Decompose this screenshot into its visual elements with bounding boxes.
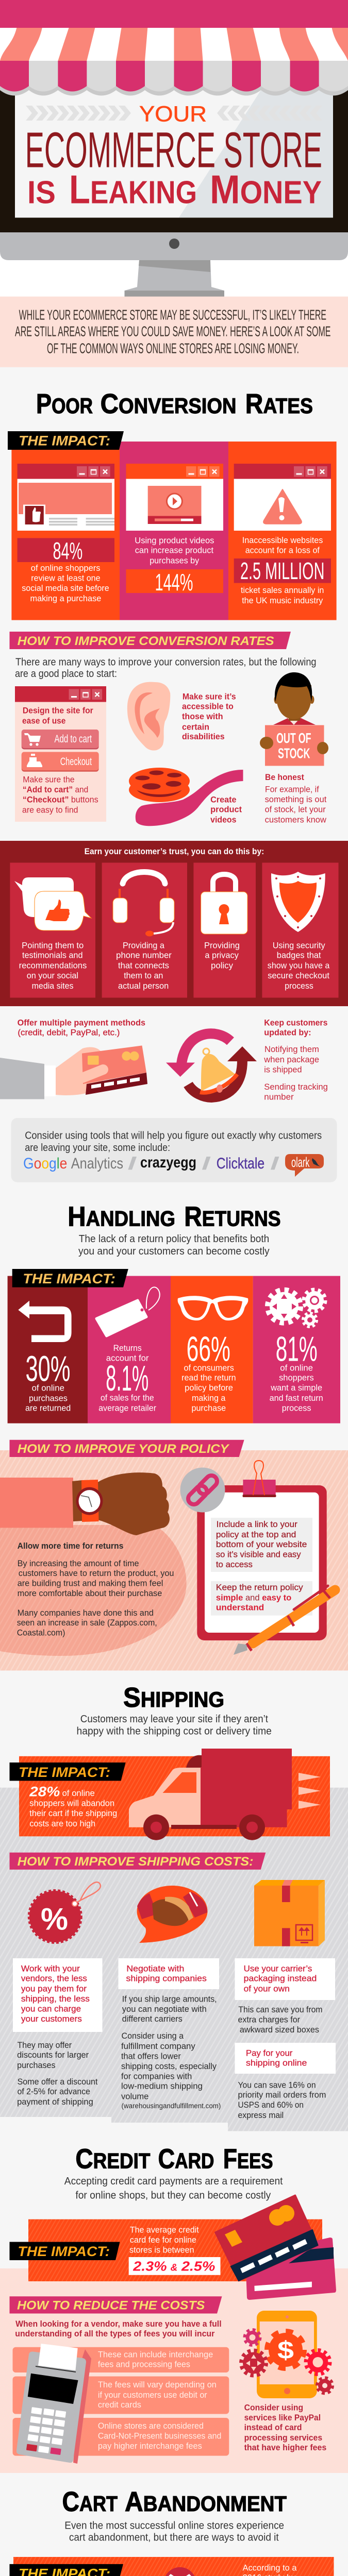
text: allow more time: customers have to return the product, you	[19, 1569, 174, 1578]
panel: shipping impact	[9, 1749, 330, 1840]
impact tag	[12, 1269, 128, 1287]
card: security badges: badges that	[277, 951, 321, 960]
text: keep customers updated: Notifying them	[264, 1045, 319, 1054]
text: packaging details: extra charges for	[238, 2015, 300, 2025]
text: negotiate details: you can negotiate with	[122, 2005, 207, 2014]
stat window: accessibility: account for a loss of	[245, 546, 320, 555]
card: testimonials: testimonials and	[22, 951, 82, 960]
banner	[9, 1440, 244, 1457]
text: be honest tip: something is out	[265, 795, 327, 804]
stat: 8.1% of sales: 8.1%	[106, 1358, 148, 1398]
stat: 8.1% of sales	[96, 1287, 160, 1413]
heading: handling returns: RETURNS	[184, 1201, 281, 1232]
callout: fee range: 2.5%	[181, 2259, 215, 2274]
list: fee rows: if your customers use debit or	[98, 2391, 207, 2400]
panel: improve your policy	[0, 1440, 348, 1670]
card: phone: actual person	[118, 981, 169, 991]
heading: handling returns: HANDLING	[68, 1201, 175, 1232]
text: credit card intro: for online shops, but they can become costly	[75, 2190, 271, 2201]
card: phone: them to an	[124, 971, 163, 980]
banner: how to improve conversion rates	[9, 632, 291, 649]
text: negotiate details: that offers lower	[121, 2052, 181, 2061]
text: accessibility tip: certain	[182, 722, 209, 732]
panel: earn trust: Earn your customer’s trust, you can do this by:	[85, 847, 264, 856]
stat: 30% returned: 30%	[26, 1348, 70, 1388]
stat: 66% read policy: read the return	[181, 1374, 236, 1383]
text: negotiate details: If you ship large amounts,	[122, 1994, 217, 2004]
text: be honest tip: customers know	[265, 816, 326, 825]
list: fee rows: These can include interchange	[98, 2350, 213, 2360]
tip: work with vendors: your customers	[21, 2014, 82, 2024]
stat: 66% read policy: 66%	[187, 1329, 230, 1368]
tip: work with vendors	[13, 1958, 102, 2032]
stat: 66% read policy: purchase	[192, 1403, 226, 1413]
impact tag	[9, 2564, 123, 2576]
icon: discount seal	[29, 1882, 101, 1942]
stat window: video	[126, 464, 223, 596]
text: vendor details: discounts for larger	[17, 2050, 89, 2060]
title	[25, 102, 322, 212]
banner: improve shipping costs: HOW TO IMPROVE SHIPPING COSTS:	[18, 1855, 254, 1869]
list: fee rows: pay higher interchange fees	[98, 2442, 202, 2451]
stat window: accessibility: Inaccessible websites	[242, 536, 323, 545]
text: keep customers updated: when package	[263, 1055, 319, 1064]
stat: 8.1% of sales: average retailer	[98, 1403, 157, 1413]
intro band	[0, 297, 348, 367]
text: keep customers updated	[263, 1018, 328, 1101]
text: allow more time: Many companies have done this and	[18, 1608, 154, 1618]
panel: credit card section	[0, 2195, 348, 2473]
logo: clicktale: Clicktale	[217, 1155, 264, 1172]
tip: carrier packaging: Use your carrier’s	[244, 1964, 312, 1973]
icon: basket with x	[134, 2567, 231, 2576]
stat: 8.1% of sales: of sales for the	[101, 1393, 154, 1402]
heading: credit card fees: FEES	[223, 2144, 273, 2175]
note: link to policy: bottom of your website	[216, 1540, 307, 1549]
panel: design window: Make sure the	[23, 775, 75, 785]
icon: delivery truck	[129, 1749, 321, 1840]
text: allow more time	[17, 1541, 174, 1637]
text: 28%: costs are too high	[29, 1819, 95, 1828]
text: accessibility tip: disabilities	[182, 732, 225, 741]
note: link to policy	[211, 1518, 312, 1572]
panel: returns impact	[8, 1269, 340, 1423]
list: fee rows: Card-Not-Present businesses and	[98, 2432, 221, 2441]
callout: fee range	[129, 2257, 221, 2275]
text: allow more time: Coastal.com)	[17, 1628, 65, 1637]
card: privacy: policy	[211, 961, 234, 971]
stat: 30% returned: are returned	[25, 1403, 71, 1413]
icon: handshake bubble	[137, 1886, 207, 1943]
text: consider paypal	[244, 2403, 326, 2452]
note: simple policy: simple and easy to	[216, 1594, 291, 1603]
add to cart button: Add to cart	[55, 733, 92, 745]
logo: olark	[285, 1154, 324, 1177]
tip: carrier packaging: of your own	[244, 1984, 290, 1993]
tip: work with vendors: Work with your	[21, 1964, 80, 1973]
text: shipping intro: happy with the shipping cost or delivery time	[76, 1725, 272, 1737]
heading: handling returns	[68, 1201, 281, 1232]
note: simple policy: Keep the return policy	[216, 1583, 303, 1592]
note: link to policy: Include a link to your	[217, 1520, 297, 1529]
text: keep customers updated: number	[264, 1092, 294, 1101]
heading: credit card fees: CREDIT	[75, 2144, 151, 2175]
card: phone: Providing a	[123, 941, 165, 950]
tip: negotiate: shipping companies	[126, 1974, 207, 1984]
text: vendor details: They may offer	[18, 2041, 72, 2050]
text: consider paypal: instead of card	[244, 2423, 302, 2432]
card: privacy: a privacy	[205, 951, 239, 960]
title: MONEY	[210, 167, 322, 212]
text: create product videos: Create	[210, 795, 236, 805]
panel: design window: Design the site for	[23, 706, 93, 715]
text: vendor details	[17, 2041, 98, 2107]
text: negotiate details	[121, 1994, 221, 2110]
icon: card terminal	[16, 2344, 91, 2464]
text: keep customers updated: Sending tracking	[264, 1082, 328, 1092]
text: consider paypal: that have higher fees	[244, 2443, 326, 2452]
panel: credit impact: The average credit	[130, 2226, 199, 2235]
text: shipping intro	[76, 1714, 272, 1737]
text: be honest tip: For example, if	[265, 785, 319, 794]
text: conversion intro	[15, 656, 317, 680]
text: payment methods: (credit, debit, PayPal, etc.)	[18, 1028, 120, 1037]
card: security badges: process	[285, 981, 313, 991]
list: fee rows: The fees will vary depending on	[98, 2380, 217, 2389]
text: be honest tip: Be honest	[265, 773, 304, 782]
stat window: video: Using product videos	[135, 536, 214, 545]
panel: credit impact	[9, 2219, 322, 2281]
stat: 30% returned	[18, 1301, 72, 1413]
heading: shipping: SHIPPING	[123, 1682, 224, 1713]
panel: design window: “Add to cart” and	[23, 785, 88, 794]
icon: clipboard	[197, 1461, 327, 1640]
tip: work with vendors: shipping, the less	[21, 1994, 90, 2004]
stat: 66% read policy: of consumers	[184, 1364, 234, 1373]
panel: analytics tools	[11, 1118, 337, 1182]
panel: design window: “Checkout” buttons	[23, 795, 98, 805]
stat: 68.63%	[242, 2564, 320, 2576]
text: conversion intro: There are many ways to improve your conversion rates, but the following	[15, 656, 317, 668]
stat window: accessibility: the UK music industry	[242, 596, 323, 605]
text: packaging details: This can save you from	[238, 2005, 323, 2014]
text: keep customers updated: updated by:	[264, 1028, 311, 1037]
tip: work with vendors: you pay them for	[21, 1984, 87, 1993]
icon: film reel	[129, 768, 243, 826]
text: allow more time: seen an increase in sale (Zappos.com,	[17, 1618, 157, 1628]
text: packaging details	[238, 2005, 323, 2035]
text: negotiate details: Consider using a	[122, 2031, 184, 2041]
impact tag: THE IMPACT:	[23, 1271, 115, 1286]
text: shipping intro: Customers may leave your site if they aren’t	[80, 1714, 268, 1725]
icon: ear	[127, 682, 170, 751]
text: cart intro: Even the most successful online stores experience	[64, 2520, 284, 2531]
checkout button	[22, 752, 99, 772]
text: accessibility tip: those with	[182, 712, 223, 721]
heading: credit card fees: CARD	[158, 2144, 214, 2175]
panel: analytics tools: Consider using tools that will help you figure out exactly why customers	[25, 1130, 322, 1142]
stat window: video: purchases by	[150, 556, 200, 566]
note: link to policy: to access	[216, 1560, 253, 1569]
card: privacy	[193, 862, 256, 997]
text: negotiate details: (warehousingandfulfillment.com)	[122, 2102, 221, 2110]
text: accessibility tip: Make sure it’s	[183, 692, 236, 702]
card: phone: that connects	[118, 961, 169, 971]
icon: discount seal: %	[41, 1902, 68, 1936]
panel: credit impact: card fee for online	[130, 2235, 196, 2245]
text: negotiate details: fulfillment company	[121, 2042, 196, 2051]
banner: how to reduce the costs: HOW TO REDUCE THE COSTS	[17, 2299, 205, 2312]
stat: 66% read policy: making a	[192, 1394, 226, 1403]
header: storefront monitor	[0, 0, 348, 298]
tip: pay online: Pay for your	[246, 2048, 293, 2058]
logo: google analytics: Analytics	[71, 1155, 123, 1172]
tip: pay online: shipping online	[246, 2058, 307, 2067]
stat window: video: can increase product	[135, 546, 213, 555]
text: cart intro	[64, 2520, 284, 2543]
stat window: social	[18, 464, 114, 603]
banner: HOW TO IMPROVE YOUR POLICY	[18, 1442, 230, 1456]
heading: poor conversion rates: RATES	[245, 388, 313, 419]
text: 28%: of online	[62, 1789, 95, 1798]
banner: how to improve conversion rates: HOW TO IMPROVE CONVERSION RATES	[18, 634, 274, 648]
title: LEAKING	[69, 167, 197, 212]
panel: cart impact	[9, 2557, 334, 2576]
text: be honest tip: of stock, let your	[265, 805, 326, 815]
note: link to policy: so it’s visible and easy	[216, 1550, 301, 1560]
icon: credit cards	[216, 2195, 336, 2300]
stat window: accessibility: ticket sales annually in	[241, 586, 324, 595]
text: consider paypal: Consider using	[244, 2403, 303, 2412]
text: pay online details: You can save 16% on	[238, 2081, 316, 2090]
heading: poor conversion rates: CONVERSION	[101, 388, 236, 419]
text: 28%	[29, 1784, 117, 1828]
text: credit card intro	[64, 2176, 283, 2201]
tip: pay online	[235, 2043, 336, 2074]
list: fee rows	[12, 2347, 229, 2456]
icon: wristwatch arm	[0, 1472, 170, 1535]
panel: analytics tools: are leaving your site, some include:	[25, 1142, 170, 1154]
text: consider paypal: services like PayPal	[244, 2413, 321, 2422]
text: allow more time: more comfortable about their purchase	[18, 1589, 162, 1598]
note: simple policy: understand	[216, 1603, 264, 1613]
card: testimonials: Pointing them to	[22, 941, 84, 950]
text: vendor details: Some offer a discount	[18, 2077, 98, 2087]
text: allow more time: Allow more time for returns	[18, 1541, 123, 1551]
list: fee rows: fees and processing fees	[98, 2360, 190, 2369]
text: keep customers updated: Keep customers	[264, 1018, 327, 1027]
stat window: social: of online shoppers	[31, 564, 100, 573]
icon: pen	[234, 1586, 335, 1655]
stat: 30% returned: purchases	[29, 1394, 68, 1403]
text: allow more time: By increasing the amount of time	[18, 1559, 139, 1568]
logo: google analytics: Google	[23, 1155, 67, 1172]
text: packaging details: awkward sized boxes	[240, 2025, 319, 2035]
icon: man with out of stock sign	[260, 672, 328, 766]
text: negotiate details: shipping costs, especially	[121, 2062, 217, 2071]
text: conversion intro: are a good place to start:	[15, 668, 117, 680]
card: testimonials: on your social	[27, 971, 78, 980]
icon: phone with gears: $	[277, 2337, 294, 2364]
stat window: video: 144%	[155, 569, 193, 596]
text: create product videos	[210, 795, 242, 825]
list: fee rows: credit cards	[98, 2400, 141, 2410]
text: accessibility tip: accessible to	[182, 702, 234, 711]
card: testimonials	[10, 862, 95, 997]
impact tag	[9, 2242, 120, 2260]
card: security badges: show you have a	[268, 961, 330, 971]
add to cart button	[22, 730, 99, 749]
heading: cart abandonment: CART	[62, 2486, 118, 2517]
card: testimonials: media sites	[32, 981, 73, 991]
text: create product videos: product	[210, 805, 242, 815]
stat window: social: review at least one	[31, 574, 101, 583]
text: vendor fees intro: When looking for a vendor, make sure you have a full	[15, 2319, 222, 2329]
text: credit card intro: Accepting credit card payments are a requirement	[64, 2176, 283, 2187]
stat: 81% simple return: and fast return	[270, 1394, 323, 1403]
checkout button: Checkout	[60, 756, 92, 768]
title: IS	[27, 175, 56, 210]
stat window: social: making a purchase	[30, 594, 101, 603]
heading: cart abandonment: ABANDONMENT	[125, 2486, 287, 2517]
note: link to policy: policy at the top and	[216, 1530, 296, 1539]
text: vendor fees intro	[15, 2319, 222, 2338]
panel: design window	[15, 686, 106, 822]
stat: 81% simple return: process	[282, 1403, 311, 1413]
text: keep customers updated: is shipped	[264, 1065, 302, 1074]
icon: cardboard box	[254, 1880, 325, 1946]
card: phone: phone number	[116, 951, 172, 960]
list: fee rows: Online stores are considered	[98, 2421, 204, 2431]
panel: design window: are easy to find	[22, 805, 78, 815]
logo: google analytics	[23, 1155, 123, 1172]
icon: bell with arrows	[166, 1033, 257, 1097]
awning	[0, 0, 348, 96]
tip: work with vendors: vendors, the less	[21, 1974, 87, 1984]
heading: credit card fees	[75, 2144, 273, 2175]
text: vendor details: payment of shipping	[17, 2097, 93, 2107]
stat: 30% returned: of online	[32, 1384, 64, 1393]
impact tag	[9, 1762, 126, 1781]
stat: 8.1% of sales: account for	[106, 1354, 149, 1363]
tip: negotiate: Negotiate with	[126, 1964, 184, 1973]
stat: 66% read policy: policy before	[185, 1383, 233, 1393]
text: be honest tip	[265, 773, 327, 825]
stat: 81% simple return	[268, 1290, 325, 1413]
banner: how to reduce the costs	[9, 2296, 222, 2313]
text: 28%: 28%	[29, 1784, 60, 1800]
tip: work with vendors: you can charge	[21, 2004, 81, 2013]
panel: conversion impact	[8, 431, 337, 620]
text: handling returns intro: you and your customers can become costly	[78, 1246, 270, 1257]
impact tag: THE IMPACT:	[18, 2244, 110, 2259]
panel: earn trust	[0, 841, 348, 1006]
monitor body	[0, 85, 348, 298]
text: pay online details: express mail	[238, 2111, 284, 2120]
card: testimonials: recommendations	[19, 961, 87, 971]
heading: poor conversion rates: POOR	[36, 388, 93, 419]
stat: 81% simple return: shoppers	[279, 1374, 314, 1383]
heading: poor conversion rates	[36, 388, 313, 419]
tip: carrier packaging	[235, 1958, 335, 2000]
text: consider paypal: processing services	[244, 2433, 322, 2443]
text: negotiate details: different carriers	[122, 2014, 183, 2024]
stat window: social: social media site before	[22, 584, 109, 593]
text: accessibility tip	[182, 692, 236, 741]
card: privacy: Providing	[204, 941, 240, 950]
panel: credit impact: stores is between	[129, 2245, 194, 2255]
stat window: accessibility	[234, 464, 331, 605]
text: negotiate details: for companies with	[121, 2072, 192, 2081]
text: pay online details	[238, 2081, 326, 2120]
text: pay online details: USPS and 60% on	[238, 2100, 304, 2110]
stat: 68.63%: According to a	[242, 2564, 297, 2573]
card: security badges	[262, 862, 338, 997]
icon: man with out of stock sign: STOCK	[278, 745, 310, 761]
text: negotiate details: volume	[121, 2092, 148, 2101]
text: pay online details: priority mail orders from	[238, 2091, 326, 2100]
text: create product videos: videos	[210, 816, 236, 825]
text: vendor details: purchases	[17, 2061, 56, 2070]
stat: 81% simple return: of online	[280, 1364, 313, 1373]
stat: 66% read policy	[178, 1296, 248, 1413]
icon: man with out of stock sign: OUT OF	[276, 730, 311, 746]
panel: shipping background	[0, 1788, 348, 2131]
heading: cart abandonment	[62, 2486, 287, 2517]
logo: olark: olark	[291, 1155, 310, 1170]
card: security badges: Using security	[273, 941, 325, 950]
text: payment methods	[18, 1018, 145, 1037]
tip: carrier packaging: packaging instead	[244, 1974, 317, 1984]
icon: phone with gears	[241, 2311, 333, 2398]
text: payment methods: Offer multiple payment methods	[18, 1018, 145, 1027]
impact tag: THE IMPACT:	[19, 1765, 110, 1780]
impact tag	[8, 431, 124, 450]
stat window: social: 84%	[53, 537, 82, 564]
text: negotiate details: low-medium shipping	[121, 2082, 203, 2091]
card: phone	[102, 862, 187, 997]
text: allow more time: are building trust and making them feel	[18, 1579, 163, 1588]
text: vendor fees intro: understanding of all the types of fees you will incur	[15, 2329, 215, 2338]
stat: 81% simple return: 81%	[276, 1329, 318, 1368]
note: simple policy	[211, 1581, 312, 1616]
text: vendor details: of 2-5% for advance	[18, 2087, 90, 2096]
stat: 81% simple return: want a simple	[270, 1383, 322, 1393]
logo: crazyegg: crazyegg	[140, 1154, 196, 1171]
icon: chain link	[180, 1467, 225, 1513]
impact tag: THE IMPACT:	[19, 433, 110, 449]
text: cart intro: cart abandonment, but there are ways to avoid it	[69, 2532, 279, 2543]
callout: fee range: &	[171, 2263, 177, 2273]
stat: 8.1% of sales: Returns	[113, 1344, 142, 1353]
card: security badges: secure checkout	[268, 971, 329, 980]
text: 28%: their cart if the shipping	[29, 1809, 117, 1818]
panel: design window: ease of use	[22, 717, 65, 726]
callout: fee range: 2.3%	[132, 2259, 167, 2274]
tip: negotiate	[119, 1958, 219, 1989]
text: handling returns intro: The lack of a return policy that benefits both	[79, 1233, 269, 1245]
title: YOUR	[139, 102, 207, 127]
text: handling returns intro	[78, 1233, 270, 1257]
icon: hand with credit card	[0, 1045, 147, 1099]
text: 28%: shoppers will abandon	[29, 1799, 114, 1808]
